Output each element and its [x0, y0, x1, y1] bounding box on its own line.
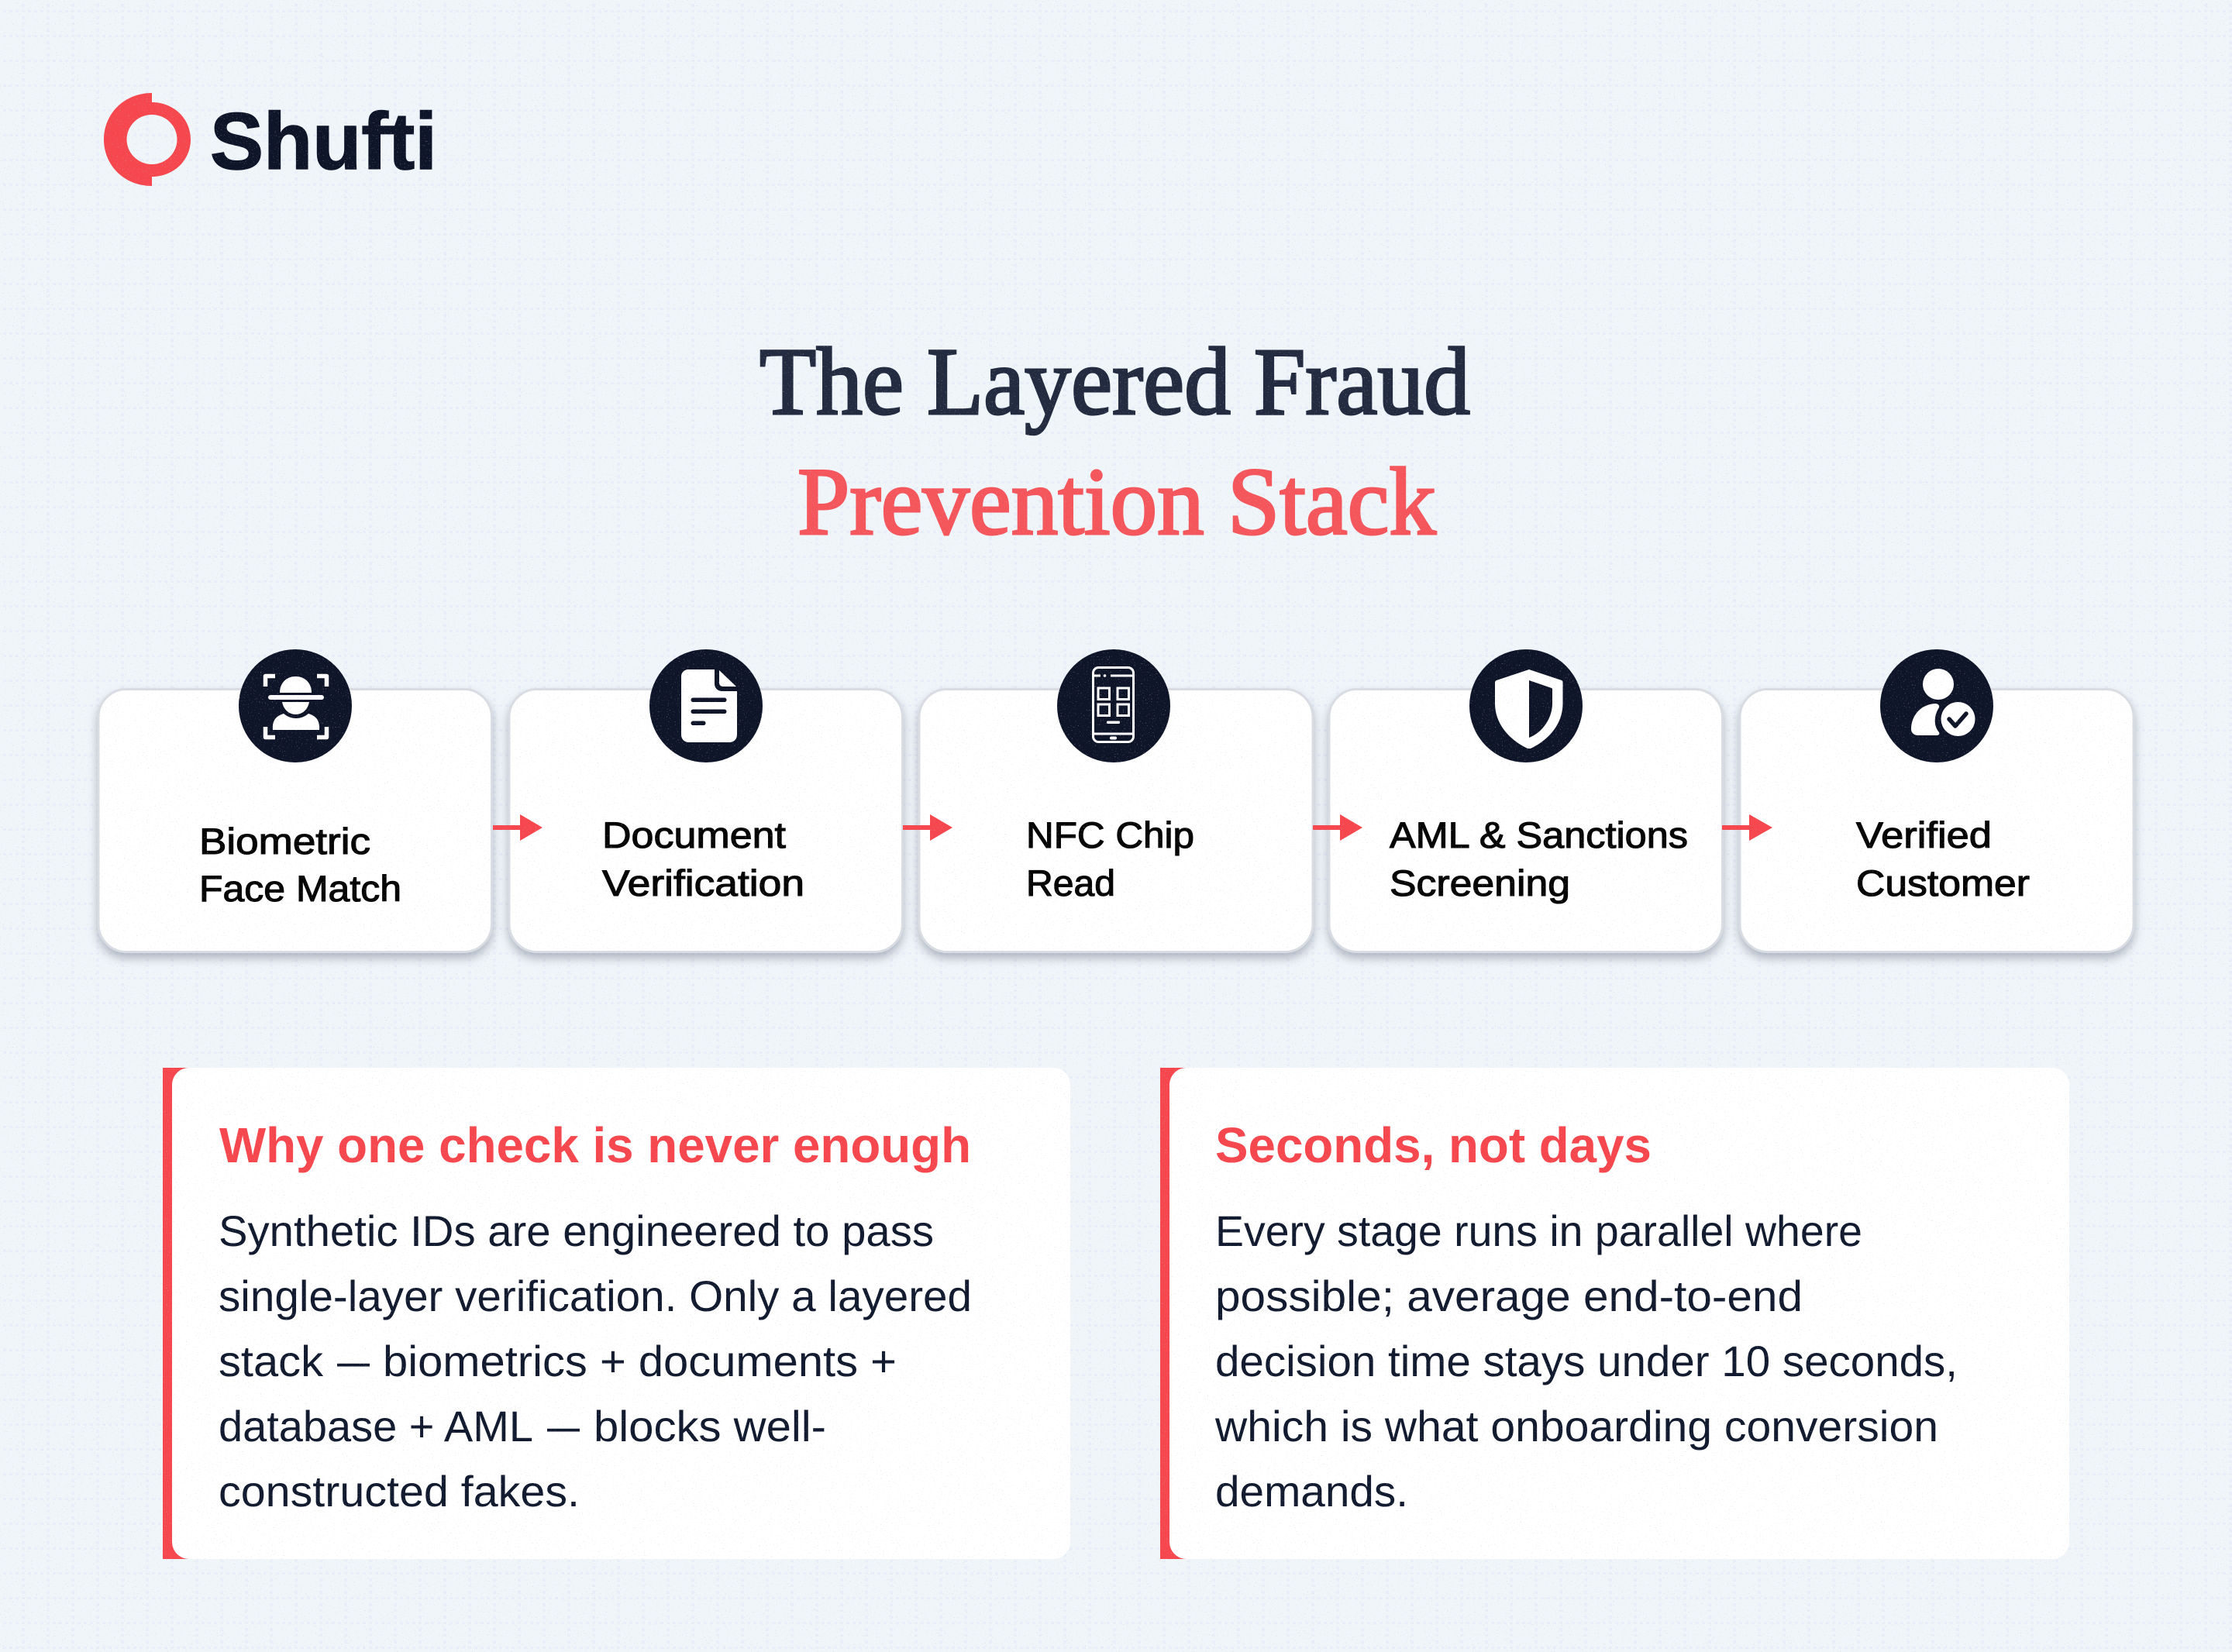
panel body text: demands. — [1215, 1467, 1408, 1516]
card label: Biometric — [199, 821, 370, 862]
panel body text: single-layer verification. Only a layered — [219, 1272, 972, 1320]
panel body text: Every stage runs in parallel where — [1215, 1206, 1862, 1255]
card label: Document — [602, 814, 786, 855]
card label: Verification — [602, 862, 804, 903]
icon: shield — [1469, 649, 1583, 762]
icon: verified person — [1880, 649, 1993, 762]
card: Biometric Face Match — [98, 649, 491, 952]
panel body text: Synthetic IDs are engineered to pass — [219, 1206, 934, 1255]
panel body text: stack — [219, 1337, 324, 1385]
panel heading: Why one check is never enough — [219, 1117, 971, 1173]
card label: Screening — [1390, 862, 1570, 903]
panel body text: which is what onboarding conversion — [1214, 1402, 1938, 1451]
icon: face scan — [239, 649, 352, 762]
card label — [1026, 814, 1194, 903]
icon: phone — [1057, 649, 1170, 762]
panel body text: decision time stays under 10 seconds, — [1215, 1337, 1958, 1385]
card label: Verified — [1856, 814, 1992, 855]
card label: Read — [1026, 862, 1115, 903]
card: NFC Chip Read — [919, 649, 1313, 952]
panel: seconds, not days — [1160, 1068, 2069, 1559]
icon: logo ring — [104, 93, 191, 186]
arrow 3 — [1313, 814, 1362, 841]
card: Document Verification — [509, 649, 902, 952]
card: Verified Customer — [1740, 649, 2134, 952]
card label — [1856, 814, 2030, 903]
panel heading: Seconds, not days — [1215, 1117, 1652, 1173]
arrow 4 — [1722, 814, 1772, 841]
panel body text — [1214, 1206, 1958, 1516]
logo wordmark: Shufti — [210, 97, 437, 187]
title line 2: Prevention Stack — [797, 449, 1436, 555]
arrow 2 — [903, 814, 952, 841]
card label: NFC Chip — [1026, 814, 1194, 855]
panel body text: blocks well- — [594, 1402, 826, 1451]
card label — [199, 821, 401, 909]
title line 1: The Layered Fraud — [760, 329, 1470, 435]
title — [760, 329, 1470, 555]
logo: Shufti — [104, 93, 437, 187]
panel: why one check is never enough — [163, 1068, 1070, 1559]
panel body text: — — [337, 1337, 370, 1385]
panel body text: — — [547, 1402, 580, 1451]
card label — [602, 814, 804, 903]
card label — [1390, 814, 1688, 903]
panel body text: database + AML — [219, 1402, 533, 1451]
icon: document — [649, 649, 763, 762]
card label: Face Match — [199, 868, 401, 909]
panel body text — [219, 1206, 972, 1516]
panel body text: constructed fakes. — [219, 1467, 580, 1516]
arrow 1 — [493, 814, 542, 841]
panel body text: biometrics + documents + — [383, 1337, 897, 1385]
panel body text: possible; average end-to-end — [1215, 1272, 1803, 1320]
card label: AML & Sanctions — [1390, 814, 1688, 855]
card: AML and Sanctions Screening — [1329, 649, 1722, 952]
card label: Customer — [1856, 862, 2030, 903]
